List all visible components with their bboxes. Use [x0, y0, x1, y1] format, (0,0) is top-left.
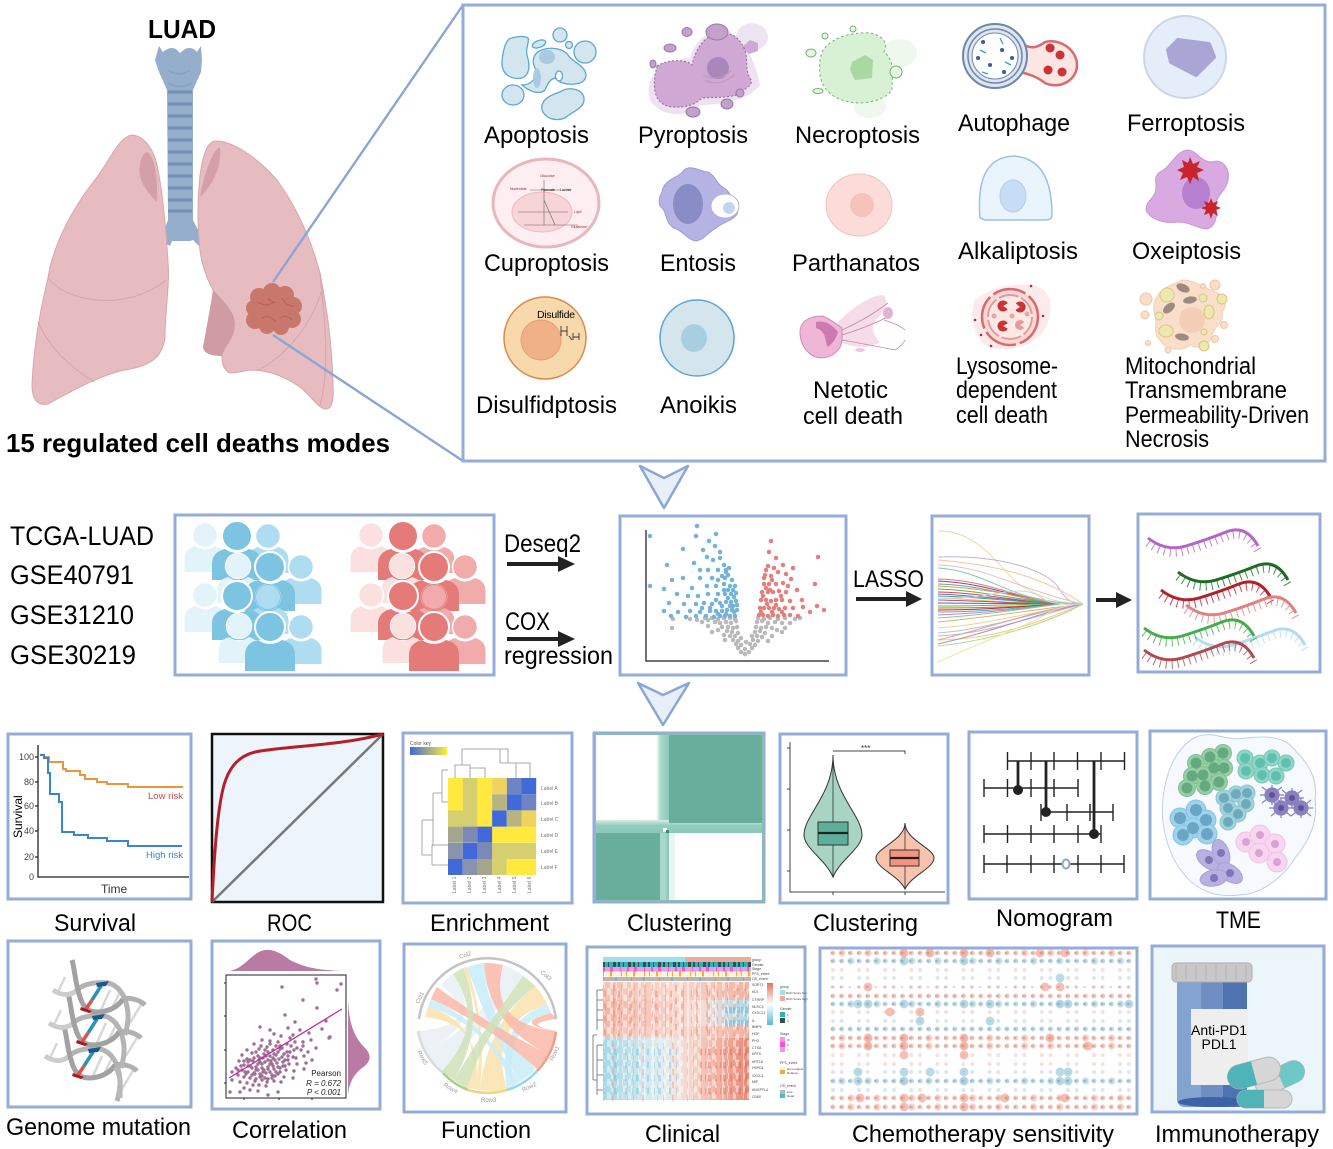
icon: parthanatos — [826, 174, 892, 236]
icon: blue patient group — [184, 521, 322, 671]
annotation legends — [780, 985, 808, 1098]
cells: pink — [1236, 825, 1287, 872]
gene labels: CTHRP — [752, 998, 765, 1002]
curve: high risk — [40, 755, 182, 846]
panel: tumor microenvironment — [1150, 731, 1326, 899]
cells: lavender — [1193, 837, 1246, 888]
annotation track labels: Gender — [752, 963, 765, 967]
nuclei: teal — [1245, 758, 1286, 776]
chart: big blue bubbles — [858, 961, 1129, 1081]
axis tick labels: 0 — [29, 872, 34, 882]
annotation legends: III — [787, 1038, 790, 1042]
annotation legends: II — [787, 1043, 789, 1047]
chart: red rows — [833, 953, 1130, 1107]
label: Genome mutation: Genome mutation — [6, 1114, 191, 1141]
annotation legends: 1 — [787, 1013, 789, 1017]
label: Disulfidptosis: Disulfidptosis — [476, 392, 617, 419]
annotation track labels: group — [752, 958, 761, 962]
label: Oxeiptosis: Oxeiptosis — [1132, 238, 1241, 265]
icon: netotic cell death — [800, 295, 905, 358]
dataset list: GSE40791 — [10, 560, 134, 590]
label: Anti-PD1 PDL1 — [1191, 1022, 1247, 1052]
gene labels: NLRC3 — [752, 1005, 764, 1009]
icon: disulfidptosis: Disulfide — [537, 309, 575, 321]
significance bracket — [833, 751, 905, 754]
annotation legends: Non-relapse — [787, 1067, 804, 1071]
chart axes — [787, 742, 945, 895]
cells: blue — [1170, 800, 1217, 845]
lung illustration — [32, 46, 333, 409]
statistics text: Pearson — [311, 1069, 341, 1078]
panel: violin plot — [780, 734, 948, 903]
outer sector arcs — [418, 958, 556, 1093]
dataset list: GSE30219 — [10, 640, 136, 670]
annotation legends: RCD Score low — [786, 991, 807, 995]
curve: low risk — [40, 755, 183, 787]
label: Lysosome-dependent cell death: Lysosome- — [956, 353, 1058, 380]
label: Color key: Color key — [410, 741, 432, 747]
panel: survival curve — [8, 734, 191, 899]
heatmap row and column labels: Label 6 — [527, 876, 533, 893]
axis tick labels — [19, 752, 34, 882]
panel: volcano plot — [620, 516, 846, 675]
heatmap row and column labels: Label 1 — [452, 876, 458, 893]
grey non-significant points — [672, 618, 800, 654]
gene labels: ANGPTL4 — [752, 1088, 768, 1092]
right density — [348, 1000, 370, 1095]
label: Enrichment: Enrichment — [430, 910, 549, 937]
arrow: chevron down 1 — [640, 466, 688, 508]
panel: consensus clustering — [594, 733, 764, 902]
annotation legends: group — [780, 985, 789, 989]
cells: green — [1178, 744, 1232, 796]
icon: mitochondrial necrosis — [1140, 280, 1228, 353]
icon: apoptosis — [502, 28, 596, 120]
annotation track labels: OS_event — [752, 977, 768, 981]
cells: purple spiky — [1260, 785, 1313, 818]
label: Netotic cell death — [803, 377, 903, 430]
gene labels — [752, 983, 768, 1099]
color legend — [767, 983, 773, 1025]
nuclei: blue-teal — [1224, 793, 1247, 822]
annotation legends: Relapse — [787, 1071, 798, 1075]
label: Entosis: Entosis — [660, 250, 736, 277]
axis title: Time: Time — [101, 882, 128, 896]
heatmap row and column labels — [452, 786, 559, 893]
panel: patient cohorts — [175, 515, 494, 675]
chart axes — [646, 530, 829, 661]
icon: trachea — [155, 46, 202, 247]
icon: red patient group — [350, 521, 486, 671]
heatmap row and column labels: Label A — [541, 786, 558, 792]
label: Autophage: Autophage — [958, 110, 1070, 137]
label: Necroptosis: Necroptosis — [795, 122, 920, 149]
icon: cuproptosis: Lactate — [560, 188, 572, 192]
label: COX: COX — [505, 608, 550, 636]
scatter frame — [224, 975, 346, 1100]
label: Correlation: Correlation — [232, 1117, 347, 1144]
panel: ROC curve — [212, 734, 383, 902]
sector labels: Row5 — [415, 1050, 428, 1067]
dendrograms — [422, 749, 530, 865]
sector labels: Row2 — [521, 1082, 538, 1094]
chart: nomogram scales — [984, 752, 1124, 873]
nuclei: blue — [1180, 810, 1207, 835]
panel: genome mutation — [8, 941, 191, 1107]
label: ROC: ROC — [267, 910, 312, 937]
annotation legends: Live — [787, 1090, 793, 1094]
label: Anti-PD1 PDL1: Anti-PD1 — [1191, 1022, 1247, 1038]
label: significance stars: *** — [861, 744, 870, 753]
nuclei: green — [1187, 753, 1224, 788]
panel: LASSO coefficient paths — [932, 516, 1089, 675]
bottle label — [1191, 1009, 1248, 1085]
cells: blue-teal — [1216, 785, 1255, 830]
arrow: Deseq2 — [507, 556, 575, 572]
label: Chemotherapy sensitivity: Chemotherapy sensitivity — [852, 1121, 1114, 1148]
marker: blue ring — [1062, 860, 1070, 868]
panel: immunotherapy — [1152, 946, 1324, 1112]
icon: oxeiptosis — [1146, 150, 1228, 229]
label: Anti-PD1 PDL1: PDL1 — [1201, 1036, 1237, 1052]
panel: gene signature strands — [1138, 514, 1320, 672]
violin: group 1 — [804, 755, 862, 877]
red up-regulated points — [759, 541, 824, 616]
top density — [230, 950, 342, 971]
axis tick labels: 80 — [24, 777, 34, 787]
icon: alkaliptosis — [979, 156, 1052, 220]
panel: correlation scatter plot — [212, 941, 380, 1109]
arrow: to gene signature — [1096, 592, 1132, 608]
sector labels: Col3 — [539, 970, 553, 983]
gene labels: IL — [752, 1019, 755, 1023]
arrow: COX — [507, 631, 575, 647]
panel: chemotherapy sensitivity bubble grid — [820, 948, 1137, 1114]
icon: DNA helices — [45, 960, 145, 1101]
gene labels: BMP6 — [752, 1025, 762, 1029]
icon: ferroptosis — [1144, 16, 1226, 98]
heatmap row and column labels: Label F — [541, 865, 558, 871]
axis tick labels: 100 — [19, 752, 34, 762]
panel: cell death modes — [463, 5, 1325, 461]
label: Netotic cell death: cell death — [803, 403, 903, 430]
label: Nomogram: Nomogram — [996, 905, 1113, 932]
callout lines to panel — [273, 5, 463, 461]
arrow: LASSO — [856, 591, 922, 607]
annotation tracks — [603, 957, 751, 981]
heatmap row and column labels: Label 4 — [497, 876, 503, 893]
chord ribbons — [419, 963, 556, 1091]
label: Clustering (consensus): Clustering — [627, 910, 732, 937]
violin: group 2 — [876, 823, 934, 889]
label: Function: Function — [441, 1117, 531, 1144]
dataset list: GSE31210 — [10, 600, 134, 630]
label: TME: TME — [1216, 907, 1261, 934]
panel: clinical heatmap — [587, 947, 808, 1114]
icon: entosis — [659, 168, 739, 241]
label: Mitochondrial Transmembrane Permeability-Driven Necrosis: Necrosis — [1125, 426, 1209, 453]
label: Mitochondrial Transmembrane Permeability-Driven Necrosis: Transmembrane — [1125, 377, 1287, 404]
sector labels: Row1 — [549, 1045, 562, 1062]
label: Immunotherapy: Immunotherapy — [1155, 1121, 1319, 1148]
annotation legends: Stage — [780, 1032, 789, 1036]
heatmap row and column labels: Label 3 — [482, 876, 488, 893]
annotation legends: PFS_event — [780, 1061, 797, 1065]
label: Lysosome-dependent cell death — [956, 353, 1058, 429]
nuclei: pink — [1246, 835, 1277, 862]
sector labels: Row3 — [481, 1098, 497, 1104]
blue down-regulated points — [650, 526, 737, 617]
icon: cuproptosis: Pyruvate — [541, 188, 555, 192]
icon: capsules — [1225, 1054, 1308, 1108]
icon: anoikis — [660, 300, 734, 376]
annotation track labels — [752, 958, 769, 981]
annotation legends: Gender — [780, 1007, 793, 1011]
icon: blue group highlighted head — [226, 554, 250, 578]
label: Cuproptosis: Cuproptosis — [484, 250, 609, 277]
gene labels: HGF — [752, 1032, 759, 1036]
nuclei: lavender — [1209, 853, 1230, 878]
label: LASSO: LASSO — [853, 566, 924, 593]
panel: enrichment heatmap — [403, 733, 572, 903]
label: Pyroptosis: Pyroptosis — [638, 122, 748, 149]
label: Survival: Survival — [54, 910, 136, 937]
annotation track labels: PFS_event — [752, 972, 769, 976]
nomogram connectors and points — [1013, 761, 1099, 839]
label: Low risk: Low risk — [148, 791, 184, 801]
chart: consensus matrix — [596, 734, 762, 900]
statistics text: R = 0.672 — [306, 1079, 342, 1088]
arrow: chevron down 2 — [638, 683, 689, 725]
label: Clinical: Clinical — [645, 1121, 720, 1148]
nuclei: purple — [1272, 795, 1301, 808]
chart axes — [35, 745, 189, 877]
color key — [410, 747, 447, 755]
title: LUAD: LUAD — [148, 14, 216, 44]
gene labels: HSPD1 — [752, 1066, 764, 1070]
label: Lysosome-dependent cell death: cell death — [956, 402, 1048, 429]
regression line — [229, 1009, 342, 1078]
dataset list: TCGA-LUAD — [10, 521, 154, 551]
sector labels: Row4 — [442, 1083, 459, 1096]
label: Alkaliptosis: Alkaliptosis — [958, 238, 1078, 265]
scatter points — [230, 979, 341, 1095]
heatmap row and column labels: Label E — [541, 849, 559, 855]
sector labels: Col2 — [459, 951, 473, 961]
gene labels: KRT18 — [752, 1060, 763, 1064]
heatmap row and column labels: Label 2 — [467, 876, 473, 893]
icon: cuproptosis: Glucose — [540, 173, 555, 178]
gene labels: KRT5 — [752, 1052, 761, 1056]
axis title: Survival: Survival — [11, 795, 25, 838]
icon: right lung — [198, 141, 333, 409]
axis tick labels: 60 — [24, 801, 34, 811]
heatmap row and column labels: Label C — [541, 817, 559, 823]
label: High risk: High risk — [146, 850, 184, 860]
icon: necroptosis — [806, 26, 917, 118]
icon: tumor — [246, 283, 302, 335]
icon: pill bottle — [1172, 963, 1252, 1107]
gene labels: KDI — [752, 990, 758, 994]
label: Mitochondrial Transmembrane Permeability-Driven Necrosis — [1125, 353, 1309, 453]
gene labels: SGRT1 — [752, 983, 764, 987]
panel: functional chord diagram — [404, 944, 566, 1112]
label: Deseq2: Deseq2 — [504, 530, 581, 558]
icon: cuproptosis: Glutamine — [571, 225, 587, 229]
gene labels: CXCL5 — [752, 1074, 763, 1078]
label: regression: regression — [504, 642, 613, 670]
panel: nomogram — [969, 732, 1137, 899]
icon: pyroptosis — [649, 23, 768, 117]
chart: coefficient curves — [938, 531, 1083, 662]
icon: disulfidptosis — [504, 297, 586, 379]
statistics text: P < 0.001 — [307, 1088, 341, 1097]
icon: cuproptosis — [493, 159, 599, 247]
label: Netotic cell death: Netotic — [813, 377, 888, 404]
axis tick labels: 20 — [24, 852, 34, 862]
annotation legends: RCD Score high — [786, 997, 808, 1001]
label: Mitochondrial Transmembrane Permeability-Driven Necrosis: Permeability-Driven — [1125, 402, 1309, 429]
annotation legends: I — [787, 1048, 788, 1052]
chart: expression heatmap rows — [603, 982, 749, 1100]
label: Parthanatos: Parthanatos — [792, 250, 920, 277]
label: Clustering (violin): Clustering — [813, 910, 918, 937]
gene labels: MIF — [752, 1080, 758, 1084]
statistics text — [306, 1069, 342, 1097]
gene labels: CXXCL1 — [752, 1011, 766, 1015]
icon: autophage — [963, 24, 1077, 88]
label: Lysosome-dependent cell death: dependent — [956, 377, 1057, 404]
annotation legends: Dead — [787, 1094, 795, 1098]
heatmap row and column labels: Label B — [541, 801, 559, 807]
label: Apoptosis: Apoptosis — [484, 122, 589, 149]
row dendrogram — [593, 990, 603, 1095]
icon: RNA strands — [1144, 530, 1305, 665]
label: Anoikis: Anoikis — [660, 392, 737, 419]
sector labels: Col1 — [415, 991, 426, 1005]
ROC curve line — [212, 734, 383, 902]
label: Mitochondrial Transmembrane Permeability-Driven Necrosis: Mitochondrial — [1125, 353, 1256, 380]
chart: big red bubbles — [860, 953, 1088, 1107]
icon: cuproptosis: Lipid — [574, 210, 581, 214]
cells: teal — [1237, 750, 1294, 784]
reference diagonal — [212, 734, 383, 902]
annotation legends: 0 — [787, 1019, 789, 1023]
dataset list — [10, 521, 154, 670]
gene labels: CTSA — [752, 1046, 762, 1050]
chart: heatmap cells — [448, 778, 536, 875]
icon: lysosome-dependent cell death — [972, 284, 1050, 349]
sector labels — [415, 951, 562, 1104]
heatmap row and column labels: Label D — [541, 833, 559, 839]
chart: blue rows — [833, 961, 1130, 1090]
gene labels: PH3 — [752, 1039, 759, 1043]
heatmap row and column labels: Label 5 — [512, 876, 518, 893]
chart: dark bubble centers — [831, 953, 1130, 1107]
icon: left lung — [32, 135, 168, 404]
label: Ferroptosis: Ferroptosis — [1127, 110, 1245, 137]
heading: 15 regulated cell deaths modes: 15 regulated cell deaths modes — [6, 428, 390, 458]
tissue outline — [1162, 735, 1316, 896]
axis tick labels: 40 — [24, 826, 34, 836]
annotation legends: OS_event — [780, 1084, 796, 1088]
gene labels: CD60 — [752, 1095, 761, 1099]
annotation track labels: Stage — [752, 967, 761, 971]
icon: cuproptosis: Nucleotide — [510, 187, 527, 191]
